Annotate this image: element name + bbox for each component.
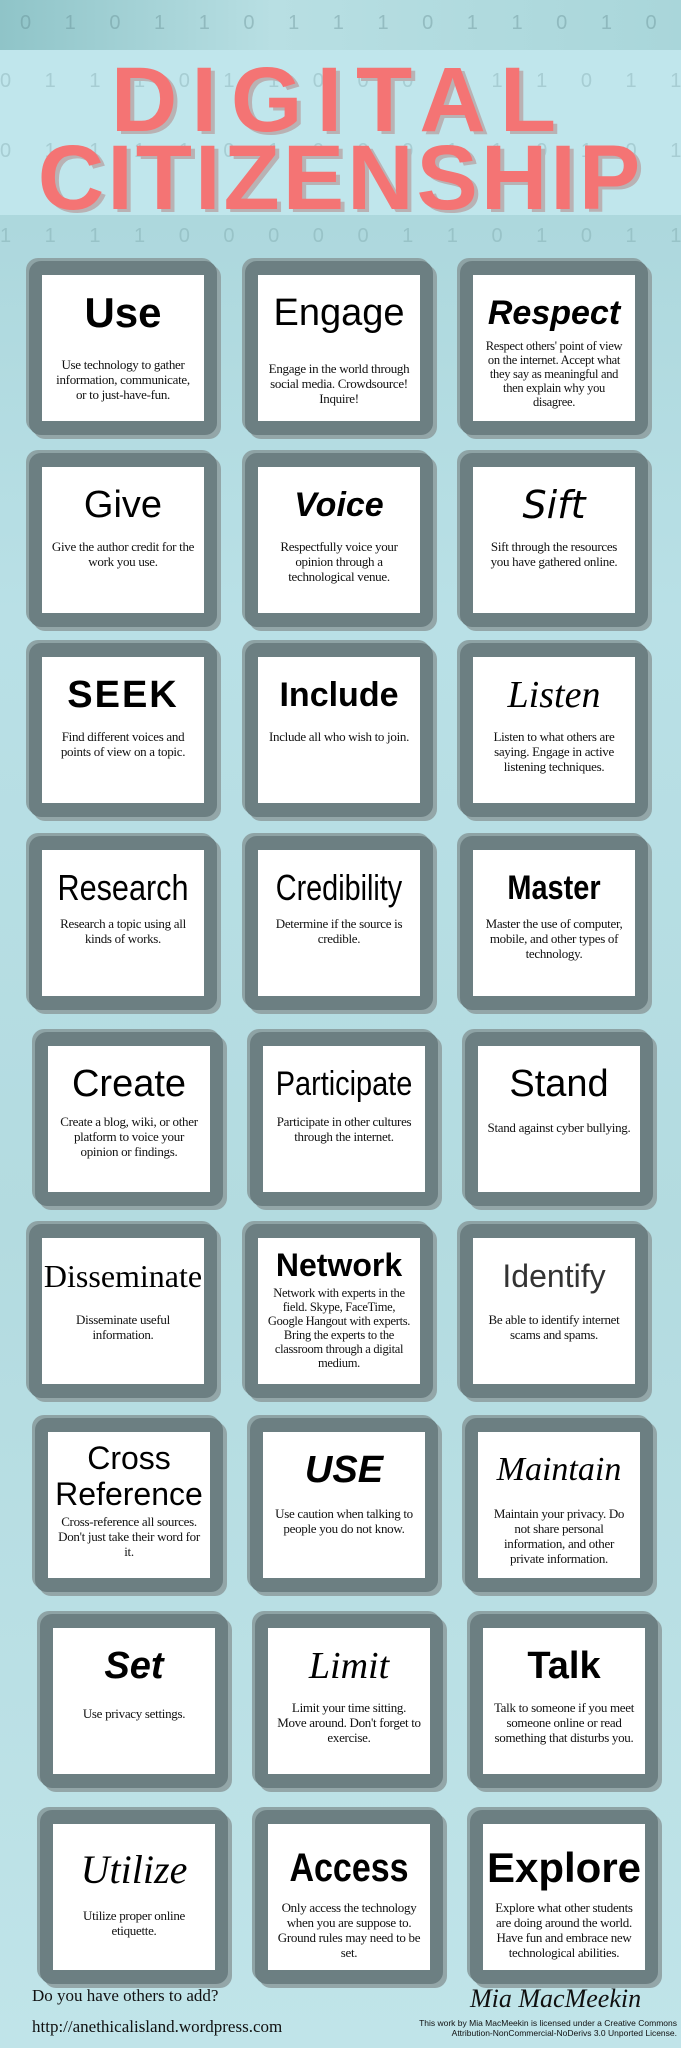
card: Respect: Respect others' point of view on the internet. Accept what they say as meaningful and then explain why you disagree. <box>486 339 622 409</box>
card: Cross Reference: Cross <box>87 1440 171 1476</box>
card: Create <box>35 1032 223 1206</box>
card: Set: Set <box>104 1645 164 1687</box>
card: Give: Give <box>84 484 162 526</box>
card: Access: Access <box>289 1846 409 1890</box>
card: SEEK: Find different voices and points of view on a topic. <box>61 729 185 759</box>
card: USE <box>250 1418 438 1592</box>
card: Stand <box>465 1032 653 1206</box>
card: USE: USE <box>305 1449 383 1491</box>
card: Sift <box>460 453 648 627</box>
card: Maintain: Maintain <box>497 1451 621 1488</box>
card: Participate: Participate in other cultures through the internet. <box>277 1114 411 1144</box>
card: Identify <box>460 1224 648 1398</box>
card: Identify: Be able to identify internet scams and spams. <box>489 1312 619 1342</box>
card: Use <box>29 261 217 435</box>
license: This work by Mia MacMeekin is licensed under a Creative Commons <box>419 2018 677 2028</box>
card: Master <box>460 836 648 1010</box>
card: USE: Use caution when talking to people you do not know. <box>275 1506 413 1536</box>
card: Engage <box>245 261 433 435</box>
card: Research <box>29 836 217 1010</box>
card: Disseminate: Disseminate <box>44 1258 202 1294</box>
card: Identify: Identify <box>502 1258 606 1294</box>
card: Stand: Stand against cyber bullying. <box>488 1120 630 1135</box>
card: Respect <box>460 261 648 435</box>
card: Create: Create a blog, wiki, or other platform to voice your opinion or findings. <box>60 1114 198 1159</box>
card: Explore: Explore <box>487 1844 641 1891</box>
card: Talk: Talk to someone if you meet someone online or read something that disturbs you. <box>494 1700 634 1745</box>
card: Give: Give the author credit for the work you use. <box>52 539 194 569</box>
card: Limit <box>255 1614 443 1788</box>
card: Research: Research <box>58 867 188 908</box>
card: Credibility: Determine if the source is credible. <box>276 916 402 946</box>
card: Listen <box>460 643 648 817</box>
card: Explore <box>470 1810 658 1984</box>
card: Engage: Engage <box>273 292 404 334</box>
card: Include: Include <box>279 676 399 714</box>
card: Set: Use privacy settings. <box>83 1706 185 1721</box>
card: Network <box>245 1224 433 1398</box>
card: SEEK <box>29 643 217 817</box>
card: Stand: Stand <box>509 1063 609 1105</box>
title: DIGITAL <box>111 49 570 151</box>
card: Disseminate: Disseminate useful information. <box>76 1312 170 1342</box>
card: Network: Network with experts in the field. Skype, FaceTime, Google Hangout with experts. Bring the experts to the classroom through a digital medium. <box>268 1286 410 1370</box>
card: Listen: Listen to what others are saying. Engage in active listening techniques. <box>493 729 614 774</box>
card: Participate: Participate <box>276 1065 412 1103</box>
card: Utilize: Utilize <box>81 1847 187 1892</box>
card: Disseminate <box>29 1224 217 1398</box>
signature: Mia MacMeekin <box>470 1984 641 2013</box>
card: Respect: Respect <box>488 294 620 332</box>
card: Maintain: Maintain your privacy. Do not share personal information, and other private information. <box>494 1506 624 1566</box>
card: Sift: Sift <box>523 483 585 527</box>
card: Credibility: Credibility <box>276 867 402 908</box>
license <box>419 2018 677 2038</box>
card: SEEK: SEEK <box>67 674 179 716</box>
card: Listen: Listen <box>508 674 600 716</box>
card: Use: Use <box>84 289 162 336</box>
card: Cross Reference <box>35 1418 223 1592</box>
card: Explore: Explore what other students are doing around the world. Have fun and embrace new technological abilities. <box>495 1900 633 1960</box>
card: Access: Only access the technology when you are suppose to. Ground rules may need to be set. <box>278 1900 420 1960</box>
card: Limit: Limit <box>309 1645 389 1687</box>
card: Utilize: Utilize proper online etiquette. <box>83 1908 185 1938</box>
card: Create: Create <box>72 1063 186 1105</box>
card: Research: Research a topic using all kinds of works. <box>60 916 186 946</box>
card: Master: Master <box>507 869 601 907</box>
card: Master: Master the use of computer, mobile, and other types of technology. <box>486 916 622 961</box>
card: Include <box>245 643 433 817</box>
card: Voice: Respectfully voice your opinion through a technological venue. <box>280 539 398 584</box>
card: Access <box>255 1810 443 1984</box>
card: Credibility <box>245 836 433 1010</box>
card: Use: Use technology to gather information, communicate, or to just-have-fun. <box>56 357 190 402</box>
card: Set <box>40 1614 228 1788</box>
card: Network: Network <box>276 1247 402 1283</box>
card: Cross Reference: Cross-reference all sources. Don't just take their word for it. <box>58 1514 200 1559</box>
card: Limit: Limit your time sitting. Move around. Don't forget to exercise. <box>277 1700 421 1745</box>
card: Sift: Sift through the resources you have gathered online. <box>491 539 617 569</box>
card: Include: Include all who wish to join. <box>269 729 409 744</box>
footer question: Do you have others to add? <box>32 1986 218 2005</box>
card: Engage: Engage in the world through social media. Crowdsource! Inquire! <box>269 361 409 406</box>
card: Talk <box>470 1614 658 1788</box>
card: Talk: Talk <box>527 1645 601 1687</box>
card: Voice <box>245 453 433 627</box>
license: Attribution-NonCommercial-NoDerivs 3.0 Unported License. <box>452 2028 677 2038</box>
card: Maintain <box>465 1418 653 1592</box>
title: CITIZENSHIP <box>38 127 643 229</box>
card: Cross Reference: Reference <box>55 1476 203 1512</box>
card: Utilize <box>40 1810 228 1984</box>
card: Participate <box>250 1032 438 1206</box>
card: Voice: Voice <box>294 486 384 524</box>
card: Give <box>29 453 217 627</box>
title <box>38 49 643 229</box>
footer url: http://anethicalisland.wordpress.com <box>32 2017 282 2036</box>
